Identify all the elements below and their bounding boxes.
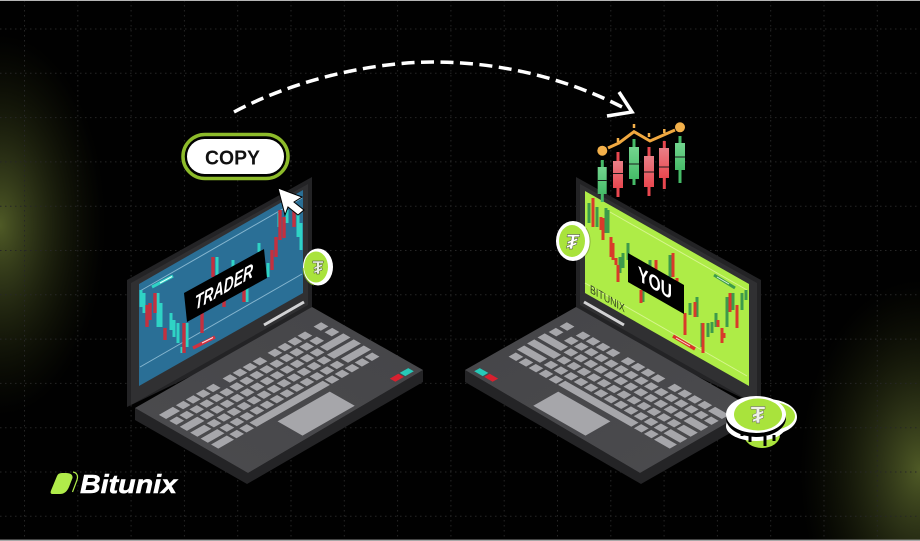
logo: Bitunix <box>51 469 179 499</box>
left laptop: trader <box>127 177 423 484</box>
trend line <box>597 122 685 156</box>
icon: mouse cursor <box>278 188 304 215</box>
laptop body with keyboard <box>127 177 423 484</box>
screen: trader chart <box>139 190 303 386</box>
logo mark <box>51 472 78 494</box>
screen: you chart <box>585 191 749 386</box>
coin stack: ₮ <box>751 402 766 429</box>
label: YOU: YOU <box>638 262 672 305</box>
COPY button: COPY <box>205 148 261 170</box>
label: YOU <box>628 253 684 314</box>
logo wordmark: Bitunix <box>80 469 179 499</box>
coin: right laptop <box>556 221 590 261</box>
label: BITUNIX on screen: BITUNIX <box>590 284 625 316</box>
coin: right laptop: ₮ <box>566 231 581 254</box>
candle wicks and bodies <box>598 136 685 202</box>
right laptop: you <box>465 177 761 484</box>
COPY button <box>183 134 288 178</box>
candlestick chart with trend line <box>597 122 685 202</box>
dashed curved arrow <box>234 62 632 116</box>
mirrored laptop body <box>465 177 761 484</box>
coin: left laptop: ₮ <box>312 258 324 278</box>
coin: left laptop <box>303 248 333 286</box>
label: TRADER: TRADER <box>195 260 254 315</box>
coin stack <box>726 396 797 448</box>
